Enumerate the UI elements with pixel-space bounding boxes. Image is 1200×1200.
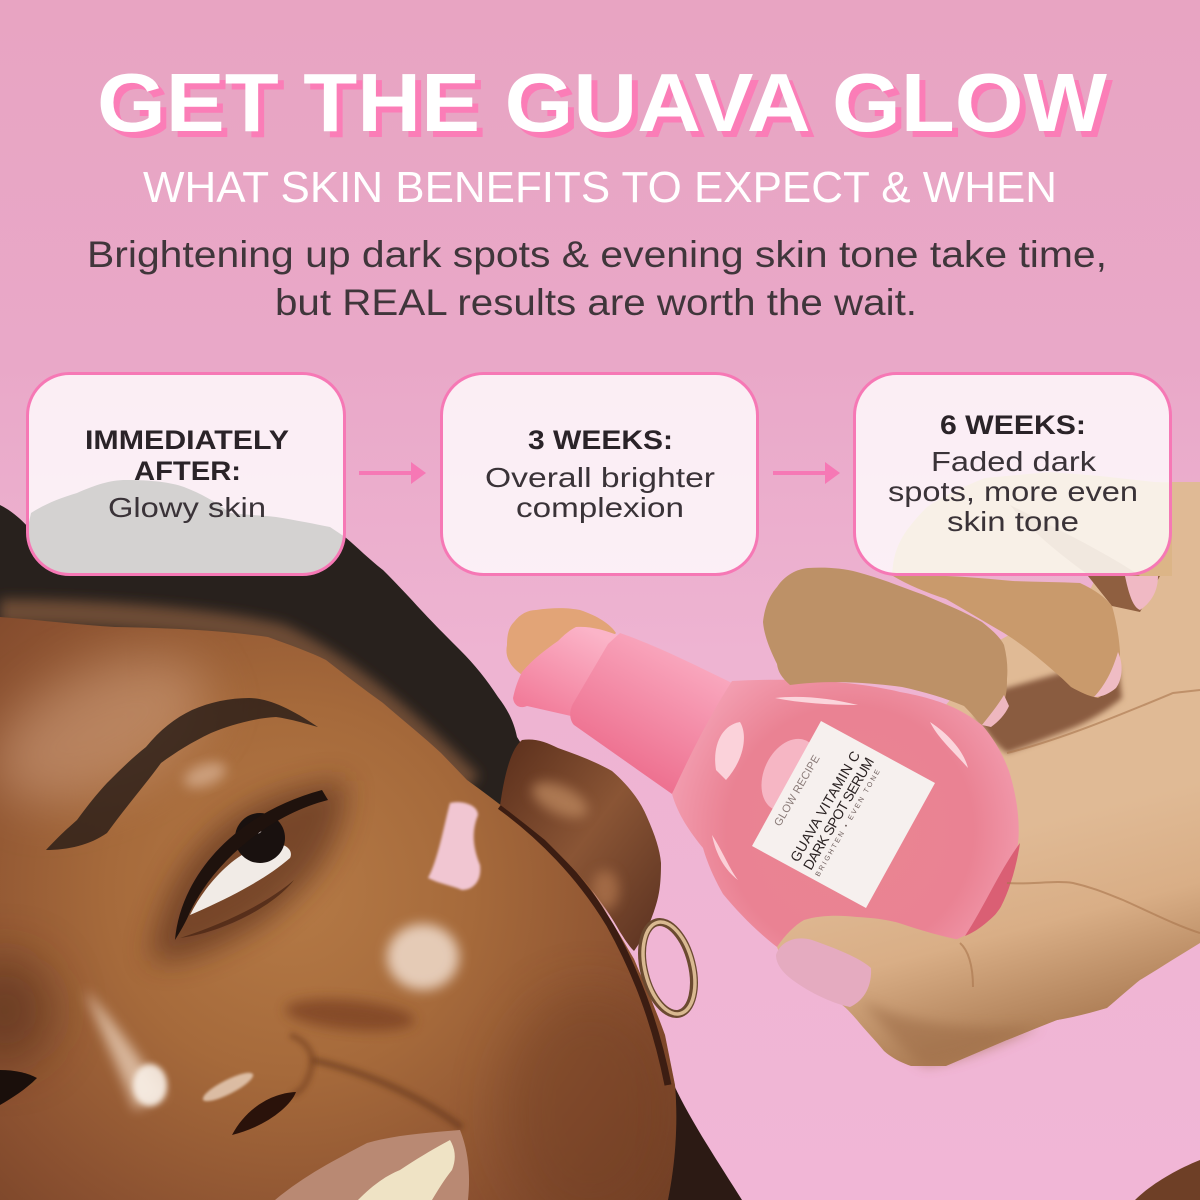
photo: woman's face: [0, 470, 742, 1200]
cheek highlight: [387, 924, 459, 990]
benefit text: [888, 446, 1138, 537]
benefit text: skin tone: [947, 506, 1079, 537]
benefit text: complexion: [516, 492, 684, 523]
eyebrow: [46, 698, 318, 850]
title shadow: GET THE GUAVA GLOW: [103, 62, 1114, 155]
panel: 3 weeks: [442, 374, 758, 574]
benefit text: spots, more even: [888, 476, 1138, 507]
hairline tone: [0, 612, 470, 785]
ear lobe highlight: [591, 870, 619, 910]
intro text: [87, 234, 1107, 323]
subtitle: WHAT SKIN BENEFITS TO EXPECT & WHEN: [143, 163, 1057, 212]
ring finger shade: [1088, 576, 1160, 612]
benefit text: Glowy skin: [108, 492, 266, 523]
hollow between fingers: [975, 665, 1122, 753]
index finger: [763, 568, 1007, 725]
middle fingernail: [1094, 652, 1122, 697]
panel: immediately after: [28, 374, 344, 574]
nose outline: [290, 1035, 312, 1095]
nostril: [232, 1092, 296, 1135]
teeth: [358, 1140, 455, 1200]
benefit text: Faded dark: [931, 446, 1097, 477]
smile crease: [312, 1060, 462, 1128]
index fingernail: [982, 695, 1009, 727]
arrow 2: [773, 462, 840, 484]
nose bridge highlight: [85, 990, 165, 1110]
heading: AFTER:: [134, 456, 241, 486]
photo: hand and serum bottle: [506, 472, 1200, 1066]
bottle dark reflex: [965, 843, 1020, 936]
shoulder at bottom right: [1135, 1160, 1200, 1200]
thumb: [777, 890, 1080, 1066]
left edge shade: [0, 955, 55, 1065]
ear: [500, 739, 661, 951]
thumbnail: [776, 938, 871, 1007]
eye white: [190, 844, 291, 915]
right cheek shade: [500, 990, 680, 1200]
forehead shine: [0, 641, 218, 819]
label tagline: BRIGHTEN • EVEN TONE: [815, 769, 882, 878]
label brand: GLOW RECIPE: [772, 753, 823, 828]
serum dollop: [428, 802, 480, 890]
serum bottle: [513, 627, 1020, 947]
thumb lower shade: [860, 1000, 1040, 1066]
pump nozzle: [513, 627, 620, 725]
ear highlight: [527, 775, 593, 825]
finger fold under card: [1010, 505, 1140, 576]
palm creases: [960, 690, 1200, 987]
eye catchlight: [258, 831, 262, 834]
heading: IMMEDIATELY: [85, 425, 289, 455]
brow shine: [181, 757, 229, 793]
bottle highlight bottom left: [712, 835, 738, 880]
eye socket shadow: [150, 780, 345, 961]
gold earring: [633, 917, 704, 1019]
arrow 1: [359, 462, 426, 484]
intro text: Brightening up dark spots & evening skin tone take time,: [87, 234, 1107, 275]
label name line 2: DARK SPOT SERUM: [800, 755, 877, 872]
bottle body: [672, 680, 1019, 947]
knuckle under card: [892, 472, 1172, 576]
heading: 6 WEEKS:: [940, 410, 1086, 440]
bottle reflection: [750, 730, 830, 820]
neck hair strip: [664, 1085, 742, 1200]
upper eyelash line: [175, 790, 328, 940]
lower lid: [180, 880, 294, 938]
upper lip: [275, 1130, 469, 1200]
ring fingernail: [1125, 576, 1158, 610]
heading: 3 WEEKS:: [528, 425, 673, 455]
palm: [900, 482, 1200, 1040]
nose tip highlight: [133, 1064, 167, 1106]
bottle highlight top: [775, 697, 858, 705]
nostril highlight: [202, 1071, 254, 1103]
panel: 6 weeks: [854, 374, 1170, 574]
head edge band: [500, 806, 668, 1085]
eye iris: [235, 813, 285, 863]
benefit text: Overall brighter: [485, 462, 715, 493]
bottle label: [752, 721, 935, 908]
second eye: [0, 1070, 37, 1105]
face: [0, 600, 690, 1200]
face skin: [0, 600, 690, 1200]
title text: GET THE GUAVA GLOW: [97, 56, 1108, 149]
title: [97, 56, 1114, 155]
heading: [85, 425, 289, 486]
middle finger: [893, 576, 1120, 698]
pump collar: [570, 633, 732, 794]
fingertip on pump: [506, 608, 616, 690]
label name line 1: GUAVA VITAMIN C: [787, 748, 863, 864]
cheek fold shade: [284, 994, 416, 1036]
hair: [0, 480, 520, 805]
intro text: but REAL results are worth the wait.: [275, 282, 917, 323]
benefit text: [485, 462, 715, 523]
bottle highlight left: [715, 722, 744, 780]
bottle highlight right: [930, 722, 968, 768]
